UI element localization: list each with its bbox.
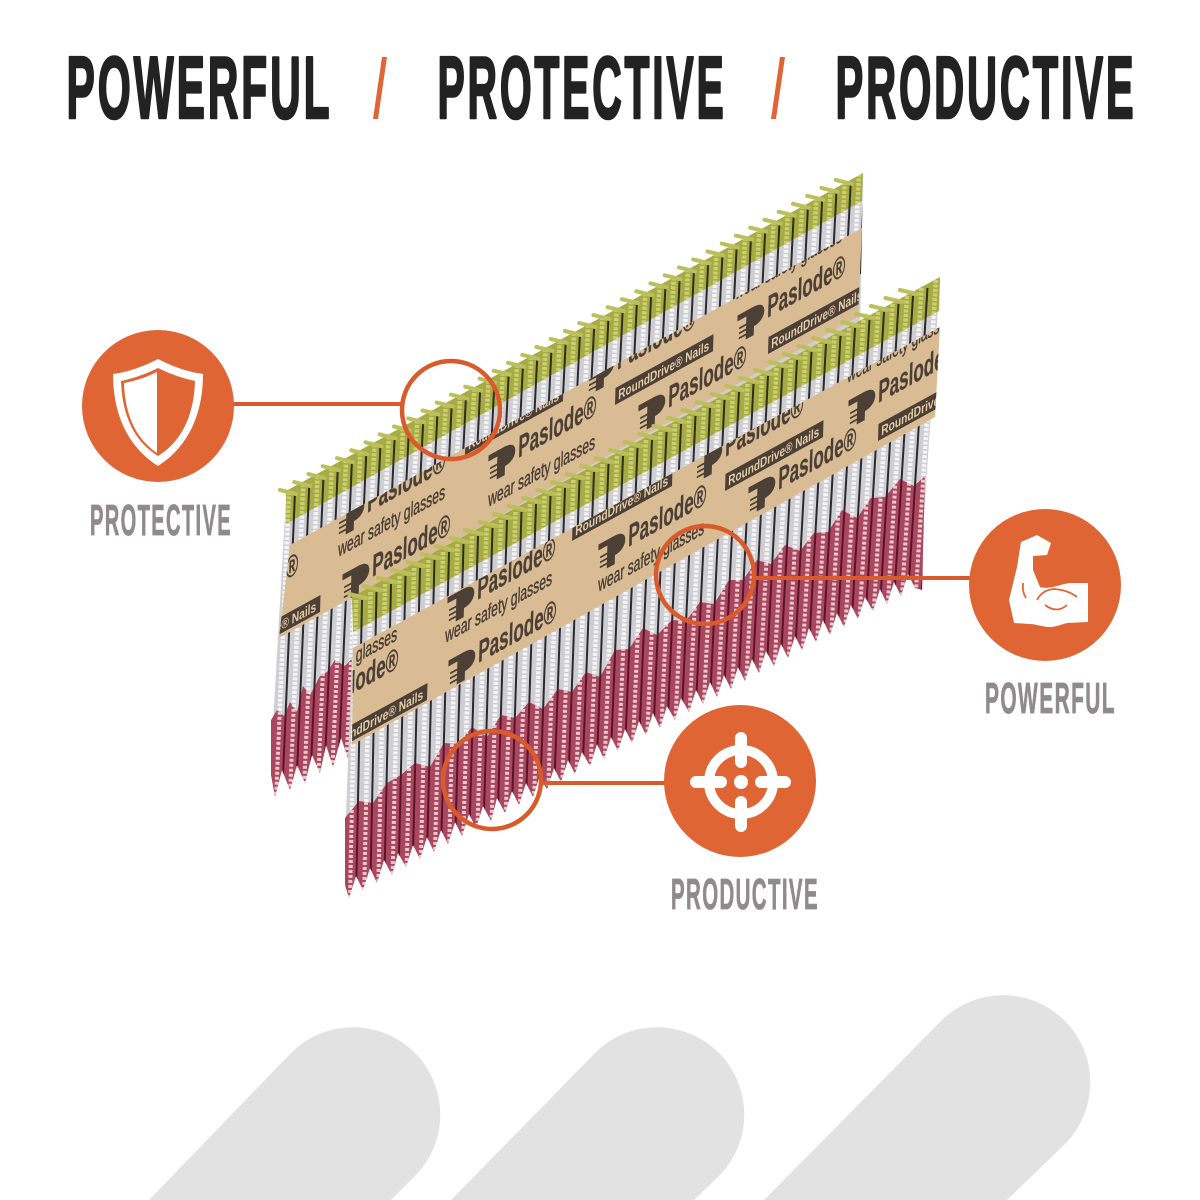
- orange badge: [82, 330, 234, 482]
- front band printing: wear safety glasses: [444, 566, 553, 648]
- front band printing: Paslode®: [320, 641, 399, 718]
- back band printing: RoundDrive® Nails: [771, 287, 862, 353]
- back band printing: RoundDrive® Nails: [618, 338, 709, 404]
- callout: protective: PROTECTIVE: [90, 496, 232, 545]
- front band printing: wear safety glasses: [846, 307, 953, 388]
- back band printing: Paslode®: [518, 388, 597, 465]
- back cardboard band: [279, 228, 862, 638]
- icon: flexed arm: [1009, 535, 1088, 627]
- decorative grey rounded bars: [149, 995, 1090, 1200]
- front nails silver section: [346, 312, 938, 816]
- back nails red section: [271, 658, 352, 797]
- front cardboard band: [352, 327, 940, 745]
- back band printing: Paslode®: [767, 248, 846, 325]
- back band printing: Paslode®: [220, 546, 299, 623]
- nail strip: back: [271, 173, 863, 797]
- title: POWERFUL: [66, 38, 332, 137]
- front nails heads: [349, 290, 917, 598]
- back band printing: Paslode®: [668, 338, 747, 415]
- magnifier ring on nail tips: [443, 731, 541, 829]
- front band printing: wear safety glasses: [289, 622, 398, 704]
- back band printing: RoundDrive® Nails: [223, 599, 316, 666]
- icon: shield: [113, 359, 203, 466]
- front band printing: [352, 327, 940, 742]
- connector line: [232, 402, 402, 406]
- callout: powerful: [656, 509, 1121, 723]
- front band printing: RoundDrive® Nails: [330, 687, 423, 754]
- title: [66, 38, 1136, 137]
- nail strip: front: [345, 277, 940, 898]
- front band printing: RoundDrive® Nails: [575, 473, 668, 540]
- callout: protective: [82, 330, 500, 545]
- back band printing: RoundDrive® Nails: [468, 388, 559, 454]
- front band printing: RoundDrive® Nails: [728, 424, 819, 490]
- back nails yellow section: [286, 173, 863, 524]
- back band printing: Paslode®: [372, 507, 451, 584]
- front nails yellow section: [352, 277, 940, 632]
- back nails silver section: [274, 176, 863, 716]
- front band printing: Paslode®: [628, 477, 707, 554]
- back band printing: Paslode®: [617, 300, 696, 377]
- front band printing: Paslode®: [878, 333, 957, 410]
- back band printing: wear safety glasses: [734, 223, 843, 305]
- back band printing: [220, 223, 867, 667]
- callout: productive: [443, 705, 819, 919]
- infographic canvas: PRODUCTIVE: [671, 870, 819, 919]
- front band printing: Paslode®: [477, 530, 556, 607]
- front nails red section: [345, 476, 925, 898]
- front band printing: RoundDrive® Nails: [881, 373, 974, 440]
- orange badge: [664, 705, 816, 857]
- back band printing: wear safety glasses: [337, 480, 446, 562]
- connector line: [541, 781, 667, 785]
- magnifier ring on nail shanks: [656, 526, 754, 624]
- magnifier ring on nail heads: [402, 361, 500, 459]
- front band printing: Paslode®: [778, 420, 857, 497]
- icon: crosshair target: [696, 738, 785, 826]
- connector line: [754, 576, 972, 580]
- front band printing: Paslode®: [725, 387, 804, 464]
- back nails heads: [280, 180, 852, 494]
- slash divider 1: [373, 57, 387, 119]
- title: PROTECTIVE: [438, 38, 726, 137]
- front band printing: Paslode®: [478, 593, 557, 670]
- back band printing: wear safety glasses: [487, 430, 596, 512]
- front band printing: wear safety glasses: [597, 515, 705, 597]
- orange badge: [969, 509, 1121, 661]
- back band printing: Paslode®: [367, 443, 446, 520]
- slash divider 2: [771, 57, 785, 119]
